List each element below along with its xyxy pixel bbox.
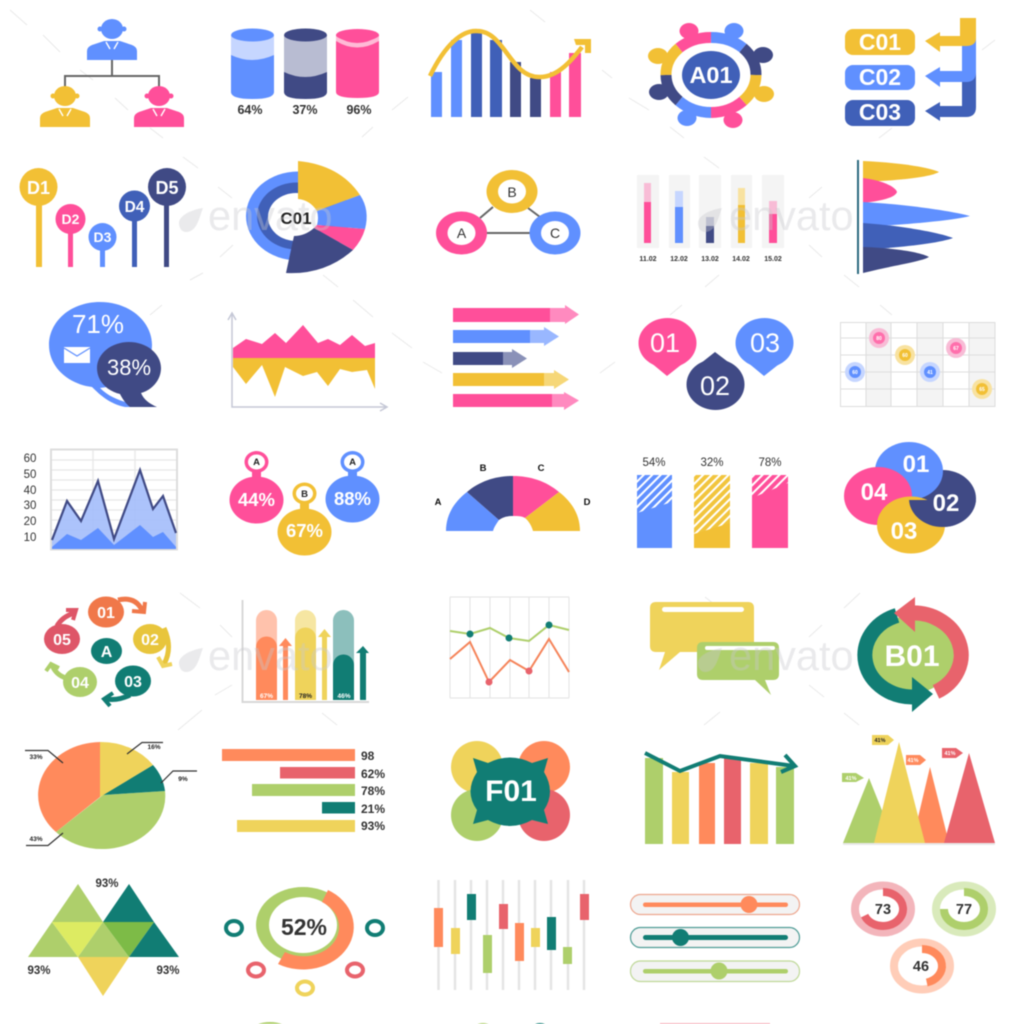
- panel: chat bubbles: [650, 602, 779, 695]
- mosaic labels: [27, 878, 180, 977]
- y axis labels: [24, 453, 36, 544]
- panel: mirrored area chart: [228, 313, 387, 411]
- mosaic labels: 93%: [27, 965, 51, 977]
- mosaic labels: 93%: [95, 878, 119, 890]
- pin labels: [27, 178, 179, 245]
- date labels: 12.02: [670, 256, 688, 263]
- panel: next row cut-off shapes: [252, 1022, 770, 1024]
- bar values: 78%: [758, 457, 782, 469]
- panel: bars with trend arrow: [645, 753, 795, 844]
- panel: C01 donut: [246, 161, 367, 273]
- quadrant letters: [435, 463, 591, 508]
- panel: 52 percent donut: [226, 887, 383, 994]
- pie labels: [29, 744, 188, 843]
- pink blob: A: [253, 457, 260, 468]
- panel: cycle of steps: 02: [141, 632, 159, 649]
- dark blue branch: [845, 70, 976, 126]
- panel: numbered drops: 01: [650, 328, 680, 358]
- bar values: [642, 457, 782, 469]
- panel: F01 badge: F01: [485, 775, 537, 808]
- bar values: 93%: [361, 819, 385, 833]
- panel: speech bubbles: [49, 302, 161, 407]
- panel: half donut: [435, 463, 591, 531]
- panel: F01 badge: [451, 741, 570, 841]
- data points: [466, 622, 552, 686]
- tag values: 41%: [874, 738, 886, 744]
- panel: C01 flow arrows: [845, 18, 976, 126]
- bar labels: 67%: [260, 693, 273, 700]
- panel: numbered drops: [638, 318, 794, 410]
- scatter labels: 80: [876, 336, 882, 342]
- bar values: 62%: [361, 767, 385, 781]
- panel: C01 flow arrows: C02: [859, 64, 901, 90]
- circle numbers: 01: [903, 451, 929, 478]
- y axis labels: 20: [24, 516, 36, 528]
- panel: horizontal bars: [222, 749, 385, 833]
- panel: cycle of steps: 01: [97, 605, 115, 622]
- blue blob: [326, 451, 380, 522]
- icon: pink employee: [134, 86, 184, 127]
- panel: percent blobs: [230, 451, 380, 556]
- pin labels: D2: [62, 211, 80, 227]
- panel: D pins: [20, 168, 186, 267]
- scatter labels: 65: [979, 387, 985, 393]
- yellow blob: B: [301, 489, 308, 500]
- panel: sliders: [630, 894, 800, 982]
- scatter labels: 41: [927, 370, 933, 376]
- panel: line and area chart: [24, 450, 177, 550]
- panel: dated vertical bars: [637, 175, 784, 263]
- pin labels: D5: [155, 178, 179, 198]
- pie labels: 33%: [29, 754, 43, 761]
- panel: A01 gear: [648, 23, 774, 128]
- node letters: B: [507, 184, 517, 200]
- gauge 77: 77: [956, 902, 972, 918]
- gauge 46: 46: [913, 959, 929, 975]
- y axis labels: 60: [24, 453, 36, 465]
- circle numbers: 03: [891, 518, 917, 545]
- cylinder labels: [237, 103, 372, 117]
- y axis labels: 50: [24, 469, 36, 481]
- pin labels: D1: [27, 178, 50, 198]
- date labels: [639, 256, 782, 263]
- quadrant letters: C: [538, 463, 545, 474]
- small rings: [226, 921, 383, 994]
- cylinder labels: 64%: [237, 103, 263, 117]
- date labels: 15.02: [764, 256, 782, 263]
- panel: speech bubbles: 71%: [72, 309, 124, 339]
- pie labels: 9%: [178, 776, 188, 783]
- watermark: envato upper right: envato: [729, 192, 854, 239]
- yellow blob: 67%: [286, 520, 323, 541]
- panel: org chart: [40, 19, 184, 127]
- bar labels: 78%: [299, 693, 312, 700]
- mosaic labels: 93%: [156, 965, 180, 977]
- pie labels: 43%: [29, 836, 43, 843]
- panel: cycle of steps: 03: [124, 674, 142, 691]
- panel: bars with curved arrow: [430, 31, 591, 117]
- node letters: C: [550, 225, 560, 241]
- panel: A01 gear: A01: [689, 62, 733, 88]
- bar labels: [260, 693, 351, 700]
- trend arrow: [645, 753, 795, 772]
- pie labels: 16%: [147, 744, 161, 751]
- node letters: A: [457, 225, 467, 241]
- gauge 73: 73: [875, 902, 891, 918]
- date labels: 14.02: [732, 256, 750, 263]
- pink blob: [230, 451, 284, 524]
- circle numbers: 02: [933, 490, 959, 517]
- circle numbers: [861, 451, 959, 545]
- date labels: 13.02: [701, 256, 719, 263]
- panel: numbered drops: 03: [750, 328, 780, 358]
- scatter labels: 60: [902, 353, 908, 359]
- icon: envelope: [64, 347, 90, 363]
- watermark: envato lower left: envato: [208, 632, 333, 679]
- watermark: envato upper left: envato: [208, 192, 333, 239]
- panel: 52 percent donut: 52%: [281, 914, 327, 940]
- cylinder labels: 96%: [346, 103, 372, 117]
- node letters: [457, 184, 560, 241]
- pink blob: 44%: [238, 489, 275, 510]
- panel: candlesticks: [434, 880, 589, 990]
- panel: progress arrows: [453, 305, 579, 410]
- blue blob: 88%: [334, 488, 371, 509]
- quadrant letters: A: [435, 497, 442, 508]
- panel: C01 flow arrows: C03: [859, 99, 901, 125]
- tag values: 41%: [845, 776, 857, 782]
- panel: dual line chart: [450, 597, 569, 698]
- scatter labels: [852, 336, 985, 393]
- pin labels: D4: [125, 199, 145, 216]
- panel: cylinders: [231, 28, 379, 117]
- step arrows: [46, 599, 172, 706]
- yellow blob: [278, 482, 332, 556]
- peak tags: [842, 735, 963, 782]
- panel: cycle of steps: 04: [71, 675, 89, 692]
- bar values: 21%: [361, 802, 385, 816]
- date labels: 11.02: [639, 256, 657, 263]
- tag values: 41%: [907, 758, 919, 764]
- quadrant letters: B: [480, 463, 487, 474]
- tag values: 41%: [944, 751, 956, 757]
- bar values: [361, 749, 385, 833]
- bar values: 78%: [361, 784, 385, 798]
- panel: horizontal spikes: [857, 160, 970, 274]
- watermark: envato lower right: envato: [729, 632, 854, 679]
- panel: scatter grid: [840, 322, 995, 407]
- panel: pie chart: [25, 742, 197, 849]
- panel: cycle of steps: [44, 596, 172, 706]
- panel: rounded bars with arrows: [242, 600, 369, 702]
- panel: cycle of steps: 05: [53, 632, 71, 649]
- panel: B01 cycle: [865, 597, 961, 712]
- bar values: 98: [361, 749, 375, 763]
- trend curve arrow: [430, 31, 591, 77]
- scatter labels: 60: [852, 370, 858, 376]
- panel: ABC nodes: [436, 170, 580, 254]
- panel: numbered drops: 02: [700, 371, 730, 401]
- y axis labels: 40: [24, 485, 36, 497]
- gear knobs: [658, 31, 764, 120]
- icon: manager: [87, 19, 137, 60]
- y axis labels: 10: [24, 532, 36, 544]
- panel: hatched bars: [637, 457, 788, 548]
- yellow branch: [845, 18, 976, 55]
- bar values: 54%: [642, 457, 666, 469]
- panel: B01 cycle: B01: [884, 640, 940, 673]
- panel: C01 flow arrows: C01: [859, 29, 901, 55]
- y axis labels: 30: [24, 500, 36, 512]
- quadrant letters: D: [584, 497, 591, 508]
- panel: triangle mosaic: [27, 878, 180, 996]
- bar labels: 46%: [337, 693, 351, 700]
- blue branch: [845, 38, 976, 90]
- cylinder labels: 37%: [292, 103, 318, 117]
- pin labels: D3: [94, 229, 112, 245]
- bar values: 32%: [700, 457, 724, 469]
- panel: radial gauges: [855, 886, 992, 990]
- panel: overlapping circles: [844, 442, 976, 554]
- panel: C01 donut: C01: [280, 209, 312, 228]
- icon: yellow employee: [40, 86, 90, 127]
- panel: cycle of steps: A: [101, 644, 113, 661]
- panel: speech bubbles: 38%: [107, 355, 151, 380]
- panel: triangle peaks: [842, 735, 995, 845]
- blue blob: A: [349, 457, 356, 468]
- circle numbers: 04: [861, 479, 888, 506]
- tag values: [845, 738, 956, 782]
- scatter labels: 67: [953, 346, 959, 352]
